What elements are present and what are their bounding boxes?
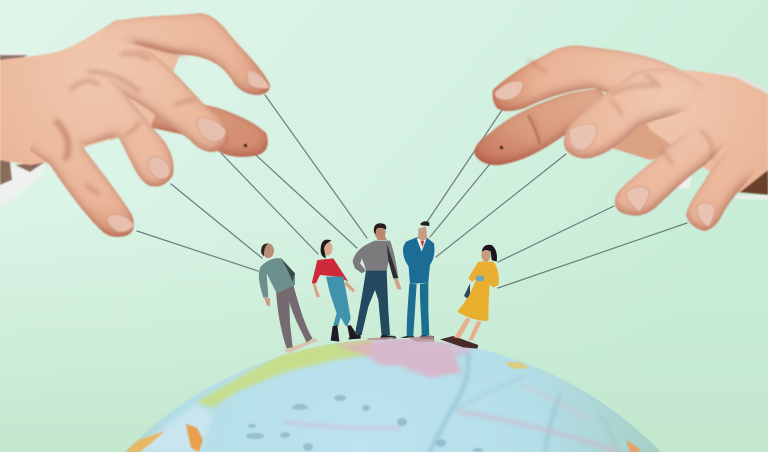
- left ring finger: [60, 72, 174, 187]
- globe: pale coastal band: [140, 406, 214, 452]
- left fingernails: [107, 70, 270, 232]
- left mole: [244, 144, 247, 147]
- figure 5: woman in yellow dress: [440, 245, 499, 349]
- figure 1: man in teal sweater: [259, 243, 318, 353]
- left index finger: [100, 13, 270, 95]
- figure 3: man in grey shirt: [348, 223, 402, 339]
- figure 4: man in blue suit: [400, 221, 434, 339]
- globe: orange patches: [186, 424, 203, 452]
- strings: [137, 95, 687, 288]
- right back of hand: [630, 69, 768, 192]
- right shirt cuff: [712, 72, 768, 94]
- right top index finger: [492, 46, 700, 111]
- globe: grid lines and markings: [285, 355, 620, 452]
- left pinky finger: [30, 120, 134, 237]
- left hand: [0, 13, 270, 237]
- left palm and wrist: [0, 19, 180, 165]
- right knuckle shading: [528, 60, 712, 165]
- left back of hand blend: [30, 25, 138, 153]
- left middle finger: [85, 48, 229, 152]
- right back of hand blend: [678, 74, 768, 179]
- right pinky finger: [686, 130, 768, 231]
- globe: pink region: [335, 338, 462, 378]
- right fingernails: [495, 81, 715, 227]
- globe: green continent: [196, 336, 372, 408]
- right hand: [475, 46, 768, 231]
- globe: [124, 336, 661, 452]
- figures: [259, 221, 499, 353]
- left knuckle shading: [55, 42, 195, 195]
- left shirt cuff: [0, 52, 46, 208]
- figure 2: woman in red top: [312, 240, 359, 342]
- right ring finger: [615, 120, 730, 216]
- left ring fingertip behind: [110, 90, 268, 157]
- right lower finger behind: [475, 88, 610, 165]
- right middle finger: [564, 68, 705, 158]
- right mole: [500, 146, 503, 149]
- right palm underside: [600, 105, 700, 160]
- figure bases: [367, 336, 435, 342]
